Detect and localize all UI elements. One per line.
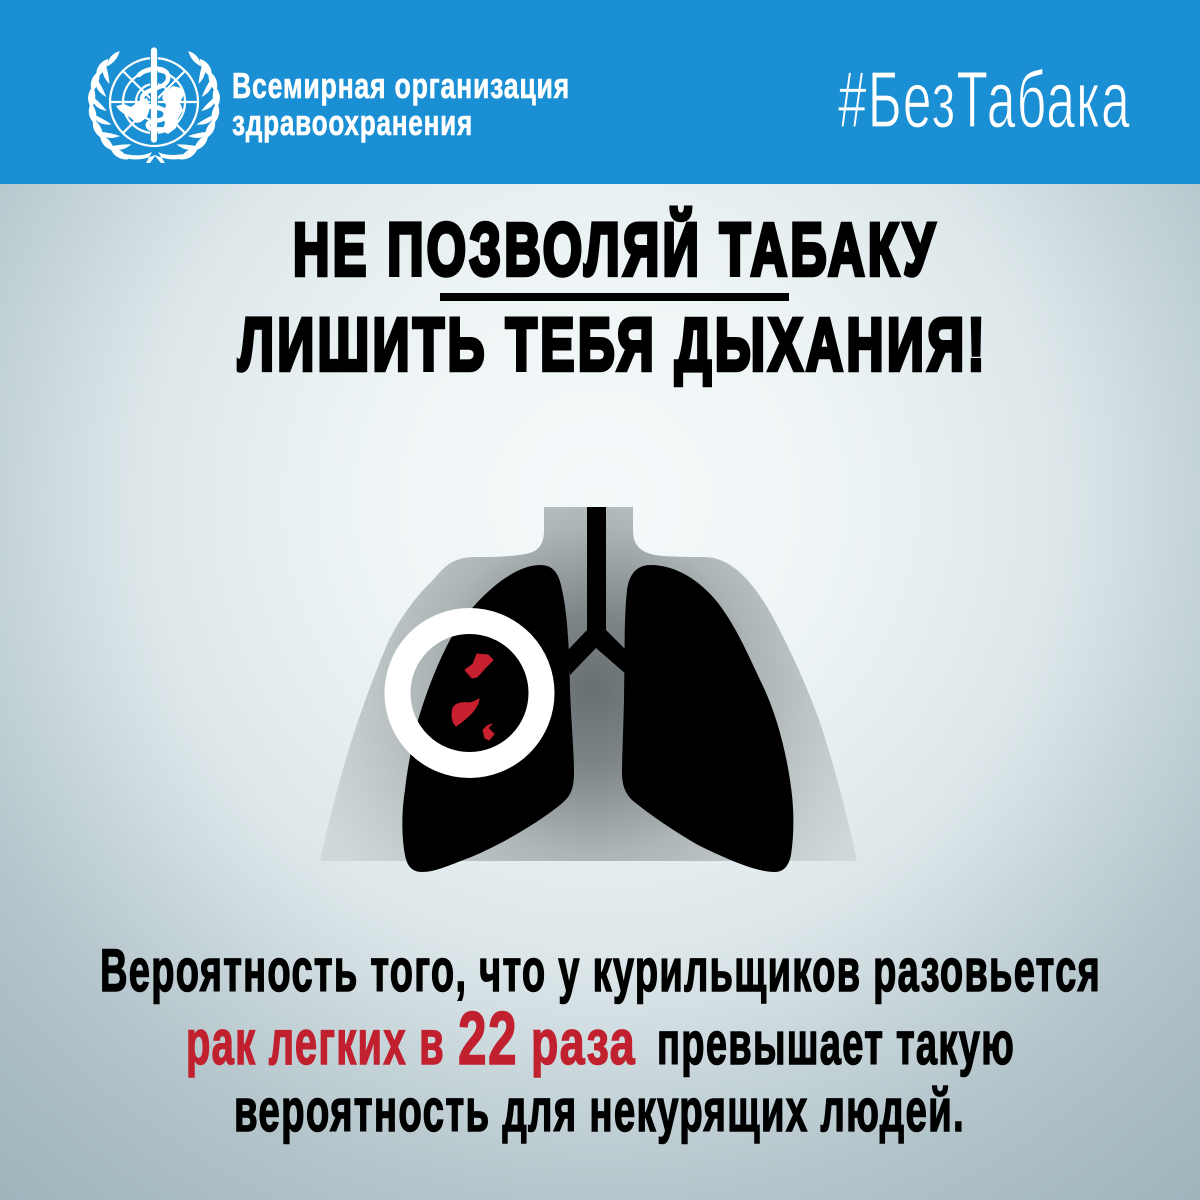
line 2 highlighted: рак легких в — [186, 1008, 445, 1078]
magnifier ring — [398, 621, 542, 765]
title rule — [440, 293, 789, 301]
emblem ribbon — [113, 151, 197, 163]
emblem continents — [116, 98, 150, 123]
body text — [100, 937, 1101, 1144]
line 2 highlighted: раза — [531, 1008, 636, 1078]
emblem snake — [139, 69, 168, 130]
organisation name — [232, 65, 570, 143]
red tumours — [452, 654, 494, 740]
right lung — [622, 565, 793, 872]
title — [238, 207, 988, 386]
emblem wreath right — [177, 49, 223, 162]
lungs illustration — [320, 507, 857, 872]
trachea and bronchi — [568, 507, 627, 675]
torso silhouette — [320, 507, 857, 861]
organisation name: здравоохранения — [232, 102, 473, 143]
emblem wreath left — [85, 49, 131, 162]
header bar — [0, 0, 1200, 184]
left lung — [402, 565, 574, 872]
emblem globe — [110, 58, 198, 146]
line 2 highlighted: 22 — [458, 996, 518, 1080]
icon: WHO emblem — [85, 47, 223, 163]
organisation name: Всемирная организация — [232, 65, 570, 106]
emblem staff — [150, 47, 158, 143]
